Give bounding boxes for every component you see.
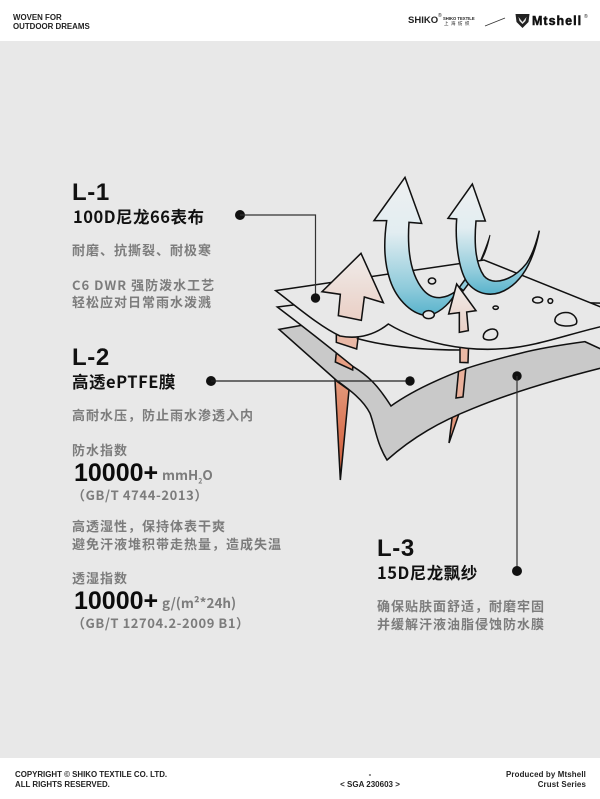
layer 3: gray fleece [277, 325, 600, 462]
breathability text [72, 516, 282, 553]
waterproof standard: （GB/T 4744-2013） [72, 485, 208, 504]
footer code: - [369, 770, 371, 779]
breathability text: 避免汗液堆积带走热量，造成失温 [72, 534, 282, 553]
back crescent [480, 234, 490, 260]
leader line L-3 [512, 371, 522, 576]
logo: Shiko Textile [408, 13, 475, 27]
L-1 description: 耐磨、抗撕裂、耐极寒 [72, 240, 212, 259]
footer credits: Crust Series [538, 780, 586, 788]
header tagline: OUTDOOR DREAMS [13, 22, 90, 31]
L-2 description: 高耐水压，防止雨水渗透入内 [72, 405, 254, 424]
footer code [340, 770, 400, 788]
L-3 description: 并缓解汗液油脂侵蚀防水膜 [377, 614, 545, 633]
left orange spike [335, 380, 349, 480]
waterproof value [74, 459, 213, 487]
droplet on large arrow [423, 311, 434, 319]
header tagline [13, 13, 90, 31]
link between blue arrows [459, 278, 469, 291]
centre lower orange spike [448, 415, 460, 444]
L-2 heading: L-2 [72, 344, 110, 371]
L-3 heading: L-3 [377, 535, 415, 562]
layered fabric diagram [206, 176, 600, 576]
breathability standard: （GB/T 12704.2-2009 B1） [72, 613, 250, 632]
leader line L-2 [206, 376, 415, 386]
L-3 subtitle: 15D尼龙飘纱 [377, 560, 478, 584]
breathability value: 10000+ [74, 587, 158, 615]
small pink arrow [449, 284, 476, 332]
logo: Mtshell [516, 14, 588, 28]
footer copyright [15, 770, 167, 788]
breathability value [74, 587, 236, 615]
breathability index label: 透湿指数 [72, 568, 128, 587]
L-1 DWR text: C6 DWR 强防泼水工艺 [72, 275, 215, 294]
L-2 subtitle: 高透ePTFE膜 [72, 369, 176, 393]
waterproof value: mmH2O [162, 464, 213, 487]
breathability value: g/(m²*24h) [162, 592, 236, 612]
breathability text: 高透湿性，保持体表干爽 [72, 516, 226, 535]
L-1 subtitle: 100D尼龙66表布 [73, 204, 204, 228]
footer copyright: ALL RIGHTS RESERVED. [15, 780, 110, 788]
small blue arrow [448, 184, 539, 294]
header tagline: WOVEN FOR [13, 13, 62, 22]
layer 1: nylon face fabric [276, 260, 600, 349]
leader line L-1 [235, 210, 320, 303]
membrane crease line [357, 338, 460, 350]
L-1 DWR text: 轻松应对日常雨水泼溅 [72, 292, 212, 311]
orange connectors on membrane [336, 334, 470, 364]
waterproof index label: 防水指数 [72, 440, 128, 459]
L-1 DWR text [72, 275, 215, 311]
logo: Shiko Textile: SHIKO TEXTILE [443, 16, 475, 21]
water droplets [428, 278, 577, 340]
logo divider slash [484, 18, 506, 26]
footer copyright: COPYRIGHT © SHIKO TEXTILE CO. LTD. [15, 770, 167, 779]
logo: Mtshell: ® [584, 14, 588, 20]
L-1 heading: L-1 [72, 179, 110, 206]
layer 2: ePTFE membrane [277, 297, 600, 406]
logo: Shiko Textile: SHIKO [408, 15, 438, 26]
large pink arrow [322, 253, 383, 320]
L-3 description: 确保贴肤面舒适，耐磨牢固 [377, 596, 545, 615]
L-3 description [377, 596, 545, 633]
footer credits [506, 770, 586, 788]
orange connectors on gray [334, 353, 466, 399]
logo: Shiko Textile: ® [438, 13, 442, 19]
waterproof value: 10000+ [74, 459, 158, 487]
footer credits: Produced by Mtshell [506, 770, 586, 779]
logo: Shiko Textile: 上海纺织 [444, 21, 472, 27]
logo: Mtshell: Mtshell [532, 14, 582, 28]
large blue arrow [374, 177, 457, 315]
footer code: < SGA 230603 > [340, 780, 400, 788]
